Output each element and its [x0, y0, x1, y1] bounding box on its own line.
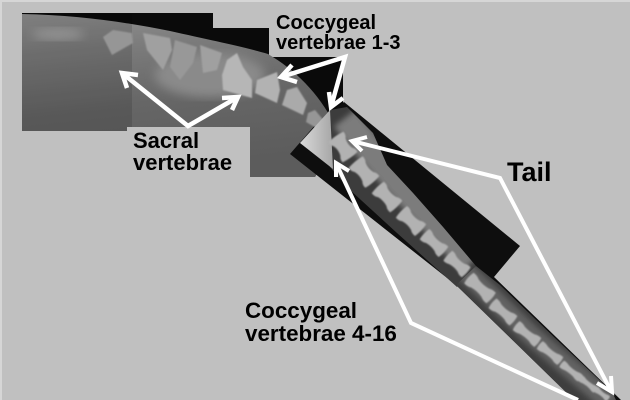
icons: tail vertebrae	[328, 131, 610, 400]
arrows: coccygeal vertebrae 1-3	[281, 57, 345, 107]
arrows: coccygeal vertebrae 4-16	[336, 163, 578, 400]
arrows: sacral vertebrae	[122, 73, 238, 126]
panel: black tail film band	[290, 102, 621, 400]
label: tail: Tail	[507, 157, 552, 187]
label: coccygeal vertebrae 4-16: vertebrae 4-16	[245, 321, 397, 346]
label: coccygeal vertebrae 4-16: Coccygeal	[245, 298, 357, 323]
label: coccygeal vertebrae 1-3: Coccygeal	[276, 12, 376, 34]
icon: light triangular wedge	[300, 110, 333, 169]
arrows: tail	[352, 137, 612, 392]
icons: sacral and proximal coccygeal vertebrae	[103, 30, 325, 130]
panel: sacral radiograph	[22, 13, 343, 177]
label: sacral vertebrae: Sacral	[133, 128, 199, 153]
panel: tail soft tissue proximal	[330, 107, 476, 287]
panel: tail soft tissue distal	[450, 262, 620, 400]
label: coccygeal vertebrae 1-3: vertebrae 1-3	[276, 32, 401, 54]
label box: sacral vertebrae	[127, 127, 250, 177]
label: sacral vertebrae: vertebrae	[133, 150, 232, 175]
